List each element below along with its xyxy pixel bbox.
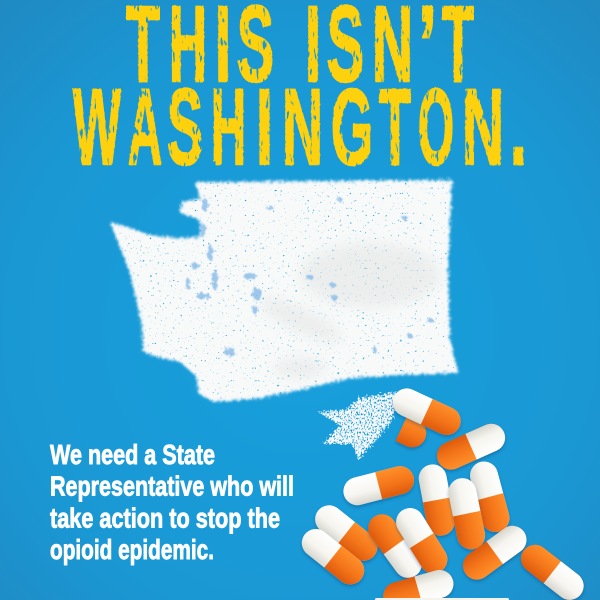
title line 2: N [462, 66, 504, 187]
message text: take action to stop the [50, 502, 280, 534]
pill [380, 567, 457, 600]
pill [416, 462, 457, 538]
pill [467, 458, 513, 535]
message text [50, 439, 294, 565]
map shading [254, 243, 440, 378]
pill [388, 384, 465, 440]
title line 2: W [73, 66, 121, 187]
pill [391, 503, 453, 579]
pill [340, 463, 417, 508]
title line 1 [126, 0, 474, 104]
powder map of Washington [110, 180, 458, 402]
pill [432, 419, 510, 474]
title line 2: I [256, 66, 273, 187]
title line 2 [73, 66, 527, 187]
pill [309, 500, 383, 566]
message text: Representative who will [50, 471, 294, 502]
title line 2: N [282, 66, 323, 187]
bottle rim [375, 598, 509, 600]
pill [457, 520, 532, 585]
title line 2: G [331, 66, 373, 187]
title line 2: S [167, 66, 203, 187]
title line 2: T [379, 66, 411, 187]
title [73, 0, 527, 187]
pill [363, 509, 427, 583]
pills [296, 384, 589, 600]
message text: opioid epidemic. [50, 534, 214, 565]
powder smear [318, 392, 398, 460]
title line 2: . [510, 66, 527, 187]
pill [446, 476, 488, 552]
pill [296, 523, 370, 590]
pill [515, 539, 589, 600]
message text: We need a State [50, 439, 215, 470]
title line 2: H [211, 66, 246, 187]
Puget Sound and lake marks [186, 198, 433, 356]
title line 2: A [128, 66, 162, 187]
title line 2: O [418, 66, 454, 187]
pill, half hidden by powder [395, 416, 431, 452]
